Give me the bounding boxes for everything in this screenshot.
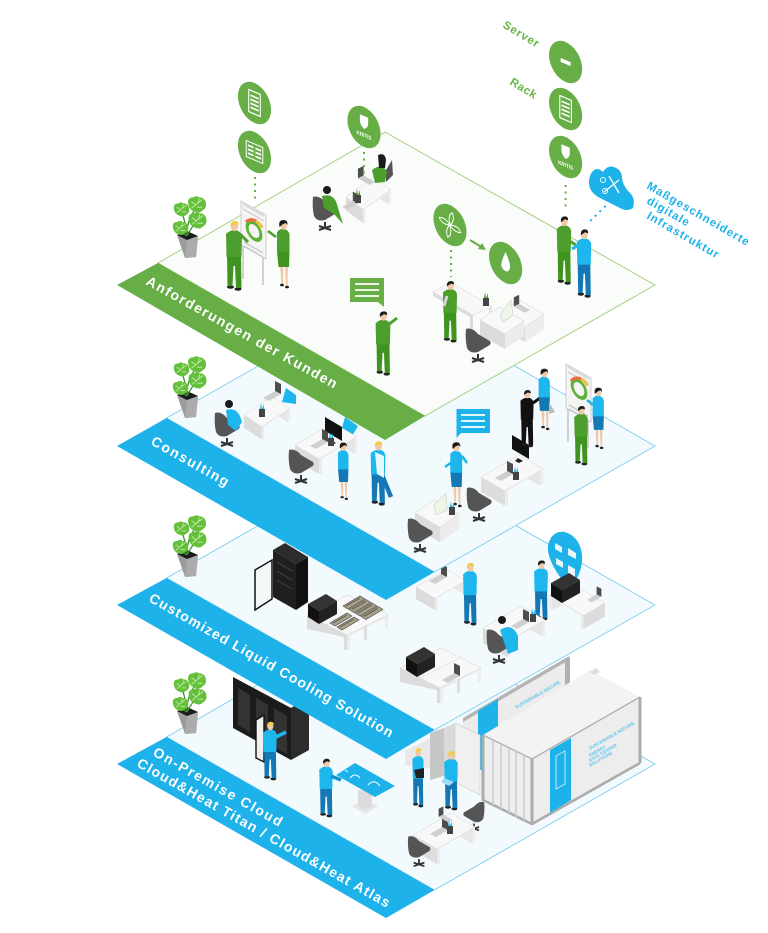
balloon icon with product images xyxy=(548,532,582,585)
band: on-premise xyxy=(117,737,434,918)
desk with monitor xyxy=(289,417,358,483)
arrow xyxy=(470,240,486,250)
container: back unit: SUSTAINABLE SECURE xyxy=(514,680,561,710)
dotted connector lines xyxy=(255,152,606,277)
icon: KRITIS shield right xyxy=(549,130,582,184)
desk with monitor and laptop xyxy=(467,435,543,521)
label: Server: Server xyxy=(500,19,541,50)
person: man walking xyxy=(371,441,391,506)
desk with black box and laptop xyxy=(400,647,481,703)
container: back unit xyxy=(463,656,570,770)
person: man with beard xyxy=(319,759,341,817)
person: woman with cap xyxy=(463,563,477,626)
flipchart with donut chart xyxy=(241,201,266,285)
person: man in blue handshake xyxy=(572,229,591,298)
icon: plant xyxy=(173,196,207,258)
container: front unit: ENERGY xyxy=(588,744,607,758)
container: front unit xyxy=(483,668,640,825)
icon: plant xyxy=(173,356,207,418)
person: man with tablet xyxy=(441,751,458,810)
desk with two workers xyxy=(313,154,393,230)
server rack with open door xyxy=(255,543,308,610)
flipchart with donut chart xyxy=(566,364,591,448)
person: talking man xyxy=(376,311,397,376)
icon: rack front xyxy=(238,76,271,130)
plane: requirements xyxy=(158,132,655,416)
person: woman at flipchart xyxy=(587,388,604,449)
interactive table xyxy=(336,763,395,814)
person: man with clipboard xyxy=(412,748,424,807)
desk with black box and laptop xyxy=(549,573,605,629)
layer 2: consulting xyxy=(117,293,655,600)
icon: water drop xyxy=(489,236,522,290)
band label line 2: Cloud&Heat Titan / Cloud&Heat Atlas xyxy=(135,755,393,911)
desk with laptop xyxy=(416,564,466,610)
band label line 1: On-Premise Cloud xyxy=(151,744,285,830)
icon: KRITIS shield left xyxy=(347,100,381,154)
band label: Anforderungen der Kunden xyxy=(144,273,340,391)
layer 1: customer requirements xyxy=(117,132,655,440)
icon: plant xyxy=(173,672,207,734)
desk with chart display xyxy=(408,493,459,552)
icon: fan xyxy=(433,198,467,252)
person: blond man xyxy=(226,221,248,291)
label: Rack: Rack xyxy=(507,76,539,102)
band label: Customized Liquid Cooling Solution xyxy=(147,590,396,741)
icon: KRITIS shield left: KRITIS xyxy=(357,130,372,142)
plane: liquid cooling xyxy=(166,452,655,730)
band: consulting xyxy=(117,418,434,600)
label: customized infrastructure: Maßgeschneiderte xyxy=(644,180,751,249)
container: front unit: DATA CENTER xyxy=(588,742,618,763)
band: requirements xyxy=(117,263,425,440)
label: customized infrastructure: Infrastruktur xyxy=(644,210,721,261)
person: woman in green xyxy=(268,220,290,288)
person: standing man xyxy=(534,560,548,620)
person: woman with tablet xyxy=(539,369,555,430)
person: woman standing xyxy=(338,443,348,500)
band label: Consulting xyxy=(149,433,232,489)
icon: rack rows xyxy=(238,125,271,179)
icon: rack xyxy=(549,82,582,136)
layer 4: on-premise cloud xyxy=(117,611,655,918)
person: man in green xyxy=(574,406,588,465)
label: customized infrastructure: digitale xyxy=(644,195,691,229)
desk with seated colleagues xyxy=(215,381,296,446)
plane: consulting xyxy=(166,293,655,572)
open doors and interior xyxy=(405,723,480,795)
icon: KRITIS shield right: KRITIS xyxy=(558,160,574,172)
layer 3: customized liquid cooling xyxy=(117,452,655,759)
icon: plant xyxy=(173,515,207,577)
server racks xyxy=(233,677,309,762)
container: front unit: SUSTAINABLE SECURE xyxy=(588,721,635,751)
person: man in black xyxy=(520,390,540,447)
person: man in green handshake xyxy=(557,216,576,285)
desks with charts xyxy=(433,282,544,362)
container: front unit: SOLUTIONS xyxy=(588,750,613,768)
person: technician at rack xyxy=(263,722,286,780)
desk with servers xyxy=(307,594,388,650)
person: woman on phone xyxy=(445,442,467,507)
icon: server xyxy=(549,35,582,89)
plane: on-premise xyxy=(166,611,655,890)
person: leaning man xyxy=(443,281,457,342)
chat bubble xyxy=(350,278,384,307)
desk group with chairs xyxy=(408,802,484,866)
icon: cloud with tools xyxy=(589,167,634,210)
band: liquid cooling xyxy=(117,578,434,759)
desk with seated man xyxy=(483,606,545,663)
chat bubble xyxy=(456,409,490,438)
